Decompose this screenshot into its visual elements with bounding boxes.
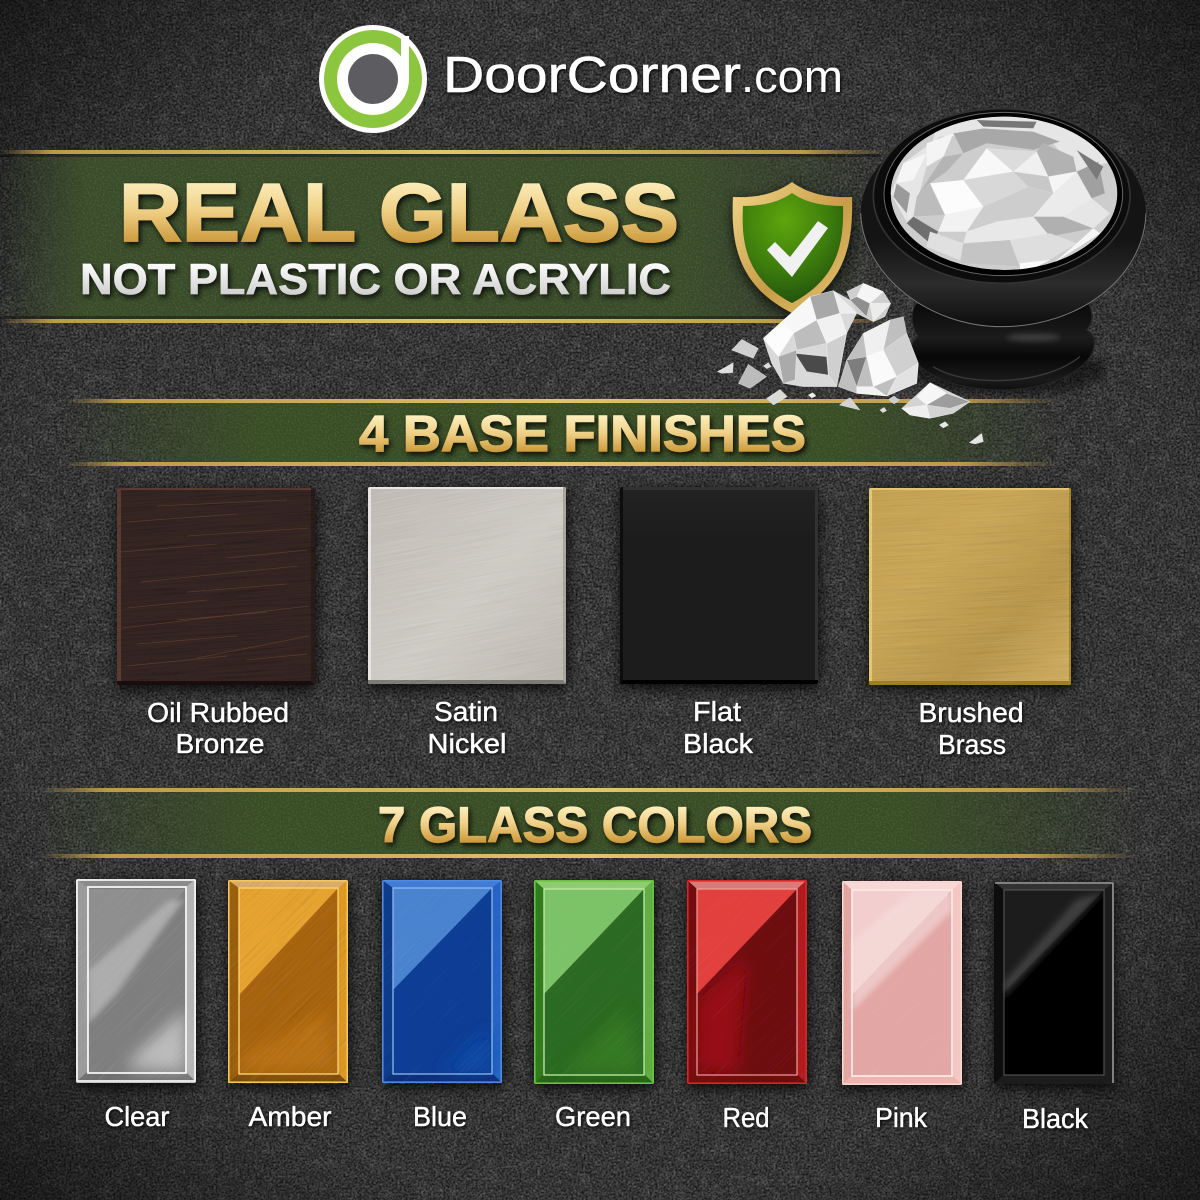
swatch: blue glass [374, 876, 512, 1096]
heading: 7 glass colors: 7 GLASS COLORS [378, 797, 812, 853]
swatch: amber glass [220, 876, 357, 1095]
label: satin nickel [428, 696, 506, 759]
shard: upper crystal [847, 283, 891, 322]
swatch: green glass [526, 876, 664, 1096]
swatch: clear glass [69, 874, 206, 1094]
shard: large crystal [763, 291, 857, 387]
label: flat black [683, 696, 754, 759]
icon: door knob logo [319, 25, 427, 133]
swatch: oil rubbed bronze [110, 484, 324, 697]
shard: right crystal [902, 383, 970, 418]
label: satin nickel: Nickel [428, 728, 506, 759]
heading: 4 base finishes: 4 BASE FINISHES [359, 405, 806, 462]
label: green: Green [555, 1101, 631, 1132]
label: black: Black [1022, 1103, 1089, 1134]
label: flat black: Black [683, 728, 754, 759]
label: brushed brass: Brass [938, 729, 1006, 760]
subheading: not plastic or acrylic: NOT PLASTIC OR ACRYLIC [80, 255, 671, 304]
knob foot [911, 303, 1094, 390]
label: brushed brass: Brushed [918, 697, 1024, 728]
crystal facets [891, 113, 1117, 270]
swatch: black glass [994, 882, 1114, 1084]
logo: DoorCorner.com [319, 25, 843, 133]
label: oil rubbed bronze: Oil Rubbed [147, 697, 289, 728]
swatch: pink glass [834, 877, 972, 1097]
heading banner: 4 base finishes [65, 399, 1060, 466]
label: blue: Blue [413, 1101, 467, 1132]
label: brushed brass [918, 697, 1024, 760]
banner: real glass [0, 150, 890, 323]
swatch: red glass [680, 876, 816, 1096]
swatch: flat black [620, 487, 818, 684]
label: oil rubbed bronze: Bronze [176, 728, 264, 759]
heading: real glass: REAL GLASS [119, 166, 679, 259]
swatch: brushed brass [862, 484, 1080, 698]
icon: green shield with check [733, 182, 852, 313]
wordmark: DoorCorner .com [443, 46, 843, 103]
icon: black knob with crystal [861, 109, 1146, 395]
heading banner: 7 glass colors [40, 788, 1140, 858]
label: pink: Pink [875, 1102, 928, 1133]
shard: clustered crystal [838, 317, 918, 396]
label: amber: Amber [248, 1101, 332, 1132]
label: oil rubbed bronze [147, 697, 289, 759]
icon: broken crystal shards [717, 283, 983, 444]
label: clear: Clear [104, 1101, 170, 1132]
swatch: satin nickel [360, 482, 576, 696]
knob body [861, 113, 1146, 327]
label: satin nickel: Satin [434, 696, 498, 727]
small crystal chips [717, 339, 983, 444]
label: flat black: Flat [693, 696, 741, 727]
label: red: Red [722, 1102, 770, 1133]
